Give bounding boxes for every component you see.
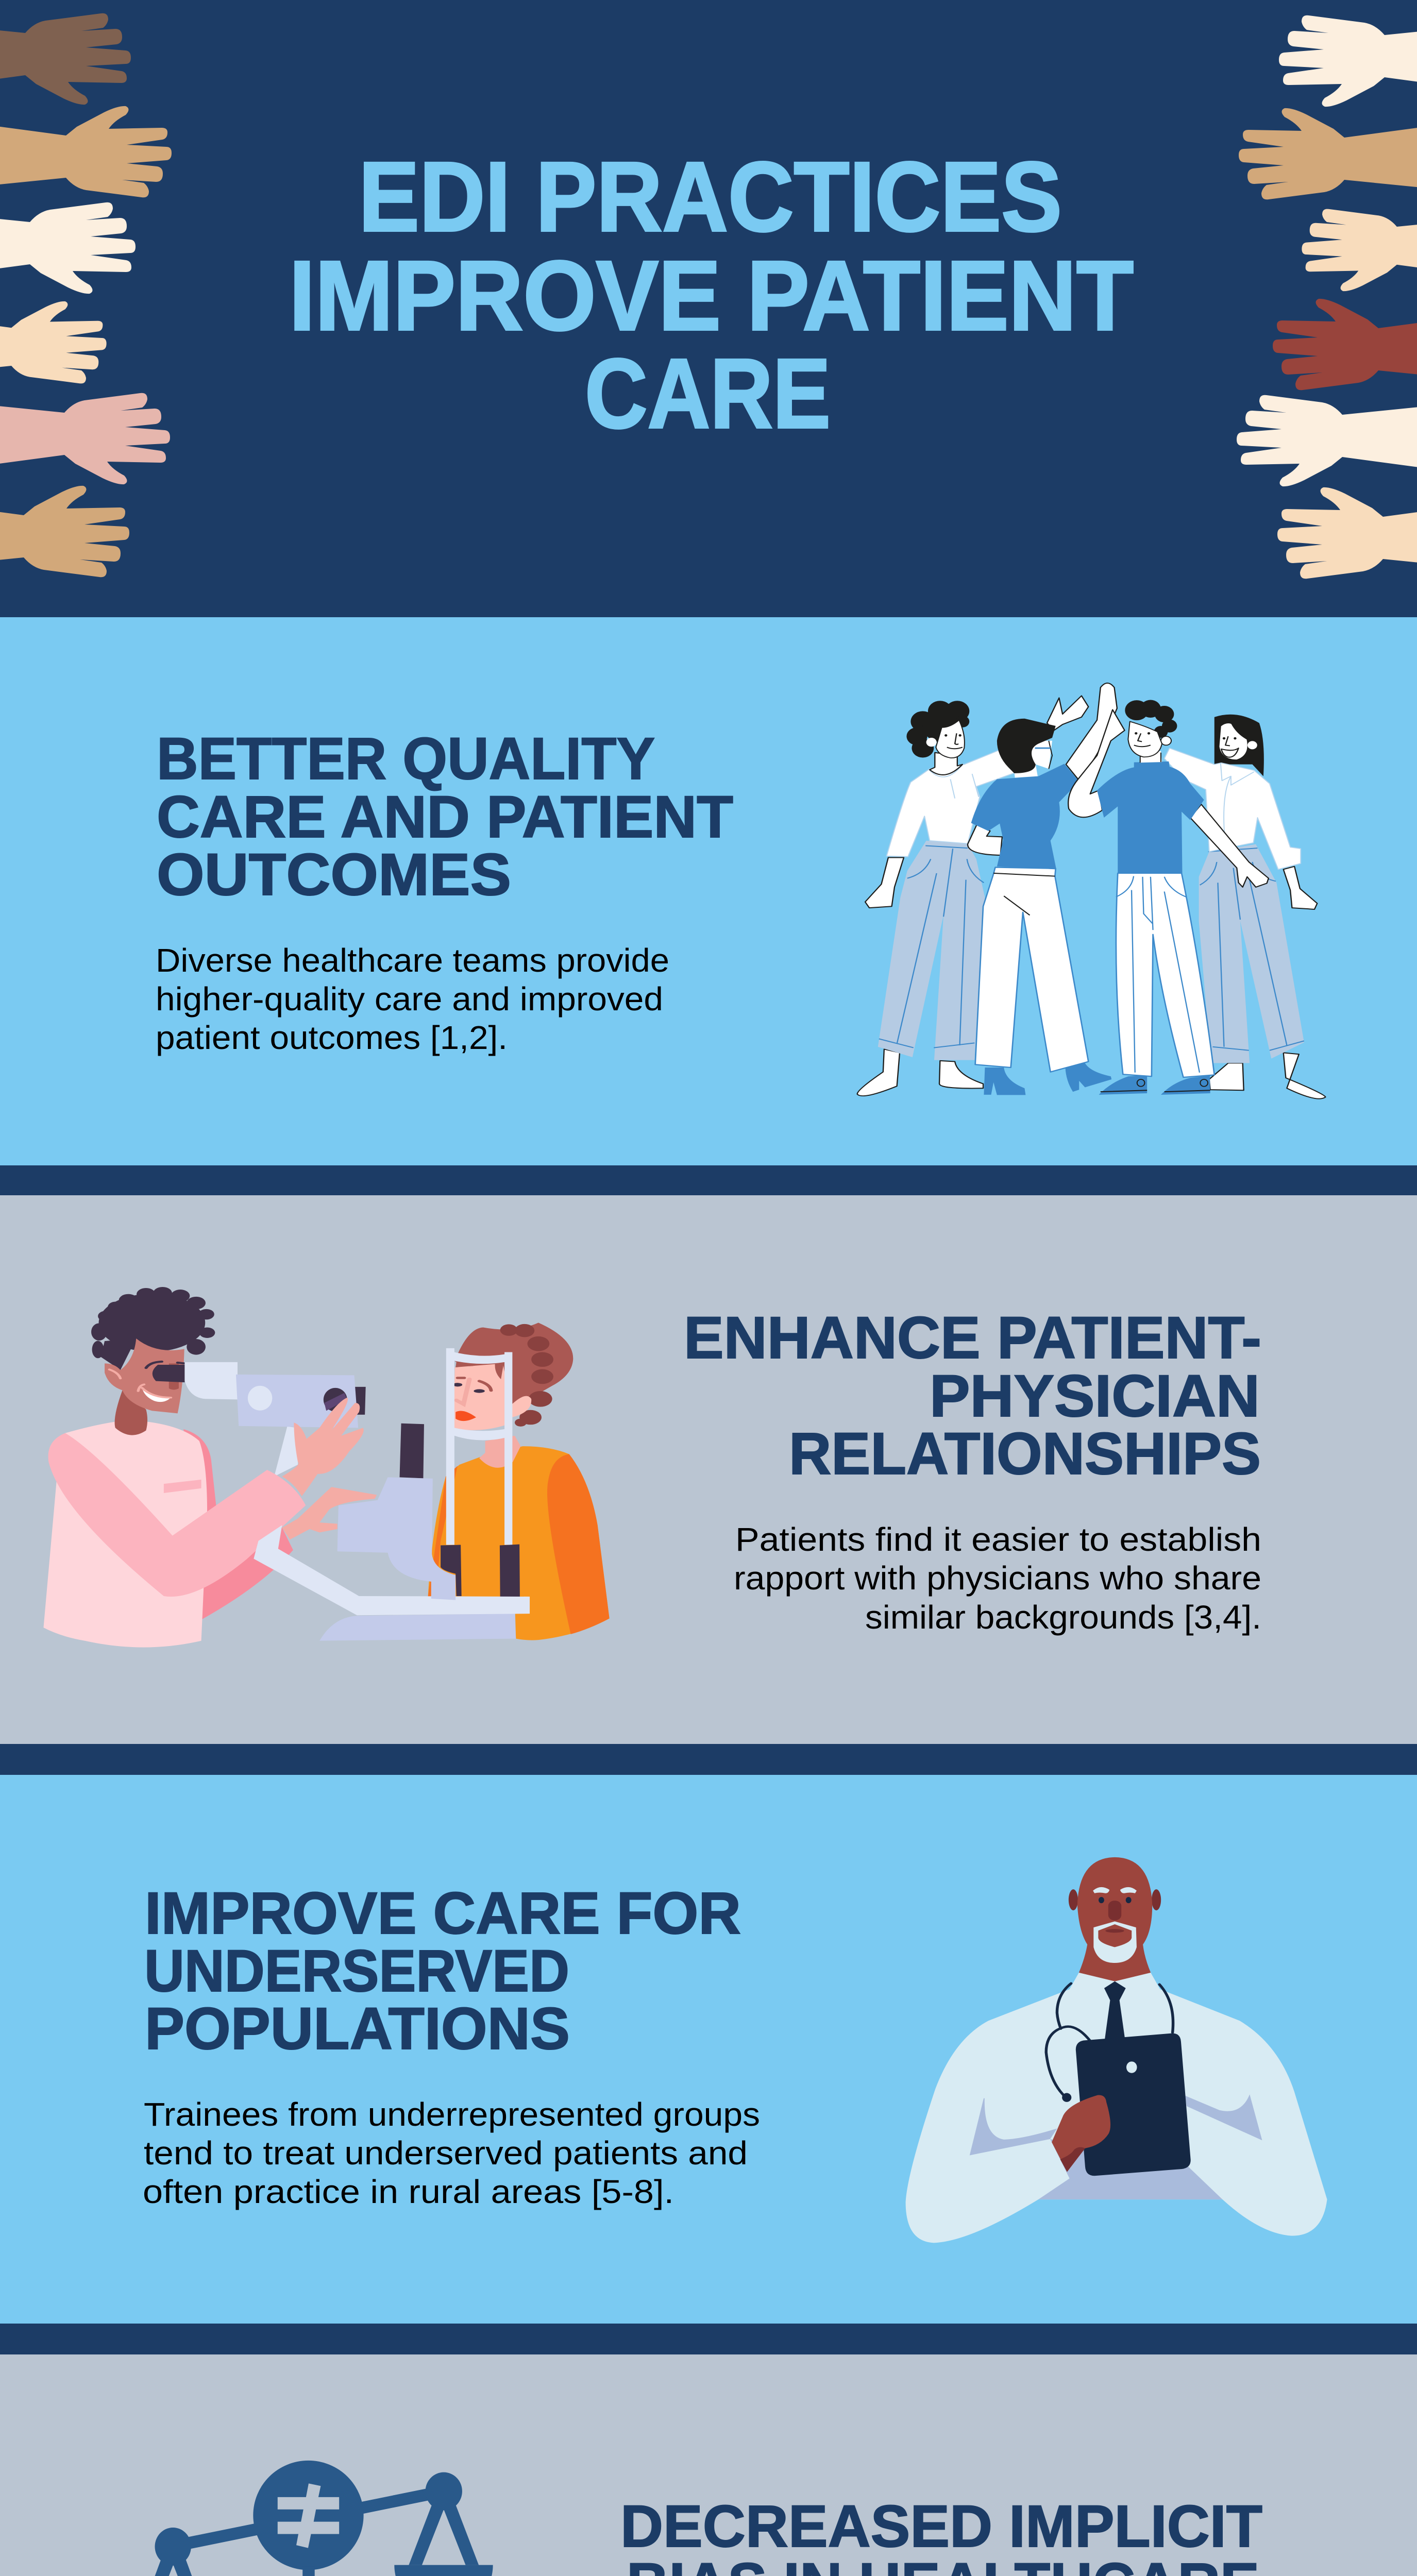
person: centre-right figure in blue [1068, 700, 1269, 1095]
illustration: four people high-fiving [857, 683, 1325, 1099]
icon: tan hand [0, 486, 129, 577]
tie [1104, 1981, 1126, 2039]
heading: better quality care [157, 726, 733, 908]
doctor [43, 1287, 293, 1647]
divider band [0, 2324, 1417, 2354]
stethoscope [1046, 1984, 1173, 2102]
divider band [0, 1165, 1417, 1195]
heading: patient-physician relationships [684, 1305, 1261, 1487]
right pan [394, 2472, 493, 2576]
right column of hands [1237, 15, 1417, 579]
illustration: doctor with tablet [906, 1857, 1327, 2243]
head [1069, 1857, 1161, 1981]
doctor sleeve and hands [48, 1398, 377, 1597]
stand [253, 2567, 364, 2576]
person: left back figure [857, 696, 1088, 1096]
heading: patient-physician relationships: ENHANCE PATIENT- [684, 1305, 1261, 1371]
icon: cream hand [1279, 15, 1417, 107]
panel: patient-physician relationships [0, 1195, 1417, 1744]
heading: underserved populations: POPULATIONS [145, 1996, 570, 2062]
heading: patient-physician relationships: PHYSICIAN [930, 1363, 1260, 1429]
icon: unbalanced scale with two people [124, 2461, 493, 2576]
person: centre-left figure in blue [968, 683, 1117, 1095]
patient [428, 1323, 610, 1640]
body text: patient-physician relationships: similar backgrounds [3,4]. [865, 1599, 1261, 1636]
body text: better quality care: patient outcomes [1,2]. [156, 1019, 508, 1056]
chin-rest frame [446, 1348, 512, 1545]
left pan [124, 2528, 223, 2576]
title: EDI PRACTICES [359, 141, 1062, 252]
title: CARE [585, 338, 831, 449]
icon: peach hand [1302, 209, 1417, 291]
divider band [0, 1744, 1417, 1775]
right dark bar [500, 1544, 520, 1599]
tablet [1076, 2033, 1191, 2176]
hand [1052, 2095, 1110, 2172]
heading: better quality care: OUTCOMES [157, 842, 511, 908]
title: IMPROVE PATIENT [289, 240, 1134, 351]
body text: patient-physician relationships: rapport with physicians who share [734, 1560, 1261, 1597]
heading: better quality care: BETTER QUALITY [157, 726, 655, 792]
body text: underserved populations: often practice in rural areas [5-8]. [143, 2173, 674, 2210]
doctor coat [906, 1973, 1327, 2243]
body text: underserved populations [143, 2096, 760, 2210]
body text: better quality care [156, 942, 669, 1056]
not-equal hub [253, 2461, 364, 2570]
icon: tan hand [0, 106, 172, 197]
panel: underserved populations [0, 1775, 1417, 2324]
machine base [254, 1423, 530, 1641]
heading: underserved populations: UNDERSERVED [144, 1938, 569, 2004]
scale beam [173, 2485, 444, 2552]
heading: implicit bias: DECREASED IMPLICIT [620, 2494, 1262, 2560]
person: right back figure [1165, 715, 1325, 1099]
icon: pink hand [0, 393, 170, 484]
icon: peach hand [0, 301, 107, 383]
panel: header [0, 0, 1417, 617]
body text: underserved populations: Trainees from underrepresented groups [144, 2096, 760, 2133]
title [289, 141, 1134, 449]
illustration: eye exam [43, 1287, 610, 1647]
heading: underserved populations [144, 1880, 741, 2062]
icon: cream hand [0, 202, 136, 294]
body text: patient-physician relationships: Patients find it easier to establish [735, 1521, 1261, 1558]
icon: cream hand [1237, 395, 1417, 486]
body text: patient-physician relationships [734, 1521, 1261, 1636]
body text: underserved populations: tend to treat underserved patients and [144, 2134, 748, 2172]
panel: better quality care [0, 617, 1417, 1165]
body text: better quality care: Diverse healthcare teams provide [156, 942, 669, 979]
left column of hands [0, 13, 172, 577]
icon: red-brown hand [1273, 299, 1417, 390]
heading: better quality care: CARE AND PATIENT [157, 784, 733, 850]
panel: implicit bias [0, 2354, 1417, 2576]
icon: brown hand [0, 13, 131, 105]
microscope head [184, 1362, 366, 1477]
body text: better quality care: higher-quality care and improved [156, 980, 663, 1018]
icon: tan hand [1239, 108, 1417, 199]
coat shadows [970, 2094, 1262, 2199]
heading: underserved populations: IMPROVE CARE FOR [145, 1880, 741, 1946]
heading: patient-physician relationships: RELATIONSHIPS [789, 1421, 1261, 1487]
icon: peach hand [1277, 487, 1417, 579]
